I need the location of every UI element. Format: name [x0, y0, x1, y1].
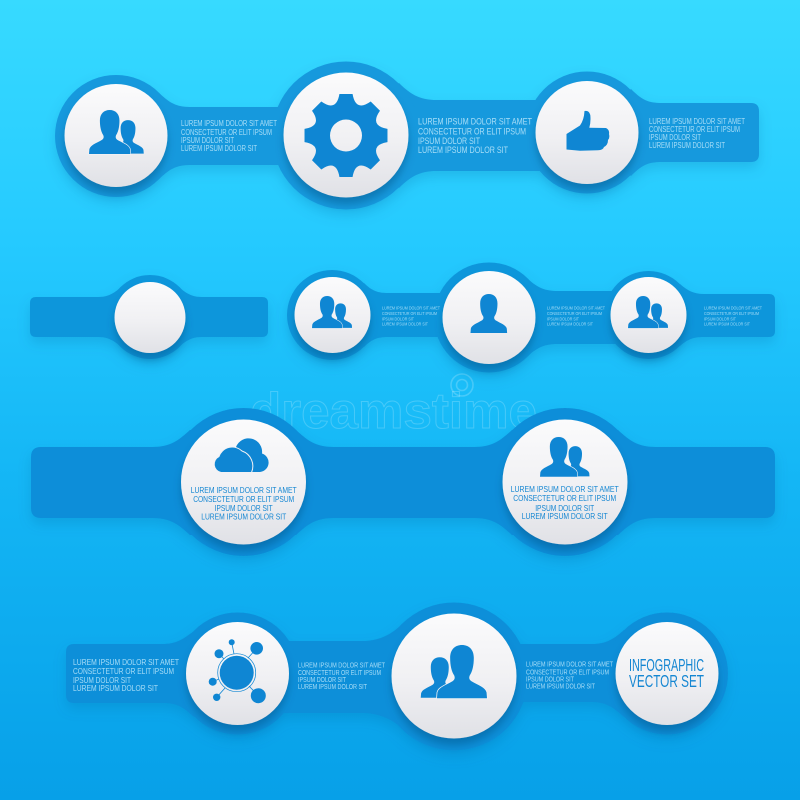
text block a: LUREM IPSUM DOLOR SIT AMET: [382, 306, 440, 311]
row 4: network, people, title ribbon: [66, 602, 728, 750]
text block 1: LUREM IPSUM DOLOR SIT: [181, 144, 257, 153]
text block 2: LUREM IPSUM DOLOR SIT AMET: [418, 116, 532, 126]
text block b: IPSUM DOLOR SIT: [547, 316, 579, 322]
text block 2: CONSECTETUR OR ELIT IPSUM: [418, 126, 526, 136]
text block d: LUREM IPSUM DOLOR SIT: [73, 683, 158, 693]
text block 3: LUREM IPSUM DOLOR SIT: [649, 141, 725, 150]
text block d: [73, 657, 179, 693]
text block 1: CONSECTETUR OR ELIT IPSUM: [181, 128, 272, 137]
text block a: CONSECTETUR OR ELIT IPSUM: [382, 311, 437, 316]
text block e: [298, 660, 385, 691]
disc: people with text: [502, 420, 628, 544]
icon: thumbs up: [566, 111, 609, 151]
icon: two people c: [628, 296, 668, 328]
icon: person: [470, 294, 507, 333]
disc: network: [186, 622, 289, 725]
text block c: IPSUM DOLOR SIT: [704, 316, 736, 322]
disc: people: [64, 84, 168, 187]
text block f: LUREM IPSUM DOLOR SIT AMET: [526, 660, 613, 668]
ribbon: blank band: [30, 275, 268, 359]
cloud disc text: LUREM IPSUM DOLOR SIT: [201, 512, 286, 522]
row 1: people, gear, thumbs-up ribbon: [55, 62, 759, 210]
text block 3: [649, 117, 745, 150]
text block d: IPSUM DOLOR SIT: [73, 675, 131, 685]
text block d: CONSECTETUR OR ELIT IPSUM: [73, 666, 174, 676]
ribbon: small people band: [287, 262, 775, 372]
disc: cloud: [181, 420, 306, 544]
text block f: LUREM IPSUM DOLOR SIT: [526, 682, 595, 690]
icon: network: [209, 639, 266, 703]
text block c: [704, 306, 762, 326]
disc: people a: [294, 277, 370, 353]
text block 3: CONSECTETUR OR ELIT IPSUM: [649, 125, 740, 134]
text block 1: IPSUM DOLOR SIT: [181, 136, 234, 145]
text block e: CONSECTETUR OR ELIT IPSUM: [298, 668, 381, 677]
icon: two people a: [312, 296, 352, 328]
people disc text: LUREM IPSUM DOLOR SIT: [522, 511, 608, 521]
text block b: CONSECTETUR OR ELIT IPSUM: [547, 311, 602, 316]
cloud disc text: LUREM IPSUM DOLOR SIT AMET: [191, 485, 297, 495]
text block 3: IPSUM DOLOR SIT: [649, 133, 701, 142]
text block 2: IPSUM DOLOR SIT: [418, 136, 480, 146]
disc: title: [616, 622, 718, 725]
text block 1: LUREM IPSUM DOLOR SIT AMET: [181, 119, 277, 128]
people disc text: LUREM IPSUM DOLOR SIT AMET: [511, 484, 619, 494]
text block a: IPSUM DOLOR SIT: [382, 316, 414, 322]
ribbon: row 1 band: [55, 62, 759, 210]
disc: person: [442, 271, 536, 364]
icon: two people: [540, 437, 590, 477]
people disc text: [511, 484, 619, 521]
text block b: LUREM IPSUM DOLOR SIT AMET: [547, 306, 605, 311]
ribbon: row 4 band: [66, 602, 728, 750]
icon: two people: [89, 110, 144, 154]
text block 1: [181, 119, 277, 153]
text block e: LUREM IPSUM DOLOR SIT: [298, 682, 367, 691]
disc: blank: [114, 282, 186, 353]
text block c: CONSECTETUR OR ELIT IPSUM: [704, 311, 759, 316]
people disc text: IPSUM DOLOR SIT: [535, 503, 594, 513]
text block 2: [418, 116, 532, 155]
icon: two people mirrored: [421, 645, 487, 698]
cloud disc text: CONSECTETUR OR ELIT IPSUM: [193, 494, 294, 504]
cloud disc text: [191, 485, 297, 522]
icon: gear: [305, 94, 387, 177]
row 3: wide band with cloud and people: [31, 408, 775, 556]
text block 3: LUREM IPSUM DOLOR SIT AMET: [649, 117, 745, 126]
disc: people large: [392, 614, 516, 738]
text block b: [547, 306, 605, 326]
text block 2: LUREM IPSUM DOLOR SIT: [418, 145, 508, 155]
text block c: LUREM IPSUM DOLOR SIT AMET: [704, 306, 762, 311]
text block a: [382, 306, 440, 326]
text block b: LUREM IPSUM DOLOR SIT: [547, 322, 593, 326]
text block f: [526, 660, 613, 690]
row 2 right: people ribbon: [287, 262, 775, 372]
cloud disc text: IPSUM DOLOR SIT: [215, 503, 273, 513]
text block e: LUREM IPSUM DOLOR SIT AMET: [298, 660, 385, 670]
text block e: IPSUM DOLOR SIT: [298, 675, 346, 684]
ribbon: wide band: [31, 408, 775, 556]
watermark: dreamstime: [250, 383, 537, 439]
text block d: LUREM IPSUM DOLOR SIT AMET: [73, 657, 179, 667]
disc: gear: [284, 72, 408, 198]
text block f: CONSECTETUR OR ELIT IPSUM: [526, 668, 609, 676]
title text: VECTOR SET: [629, 671, 704, 691]
title text: [629, 655, 704, 691]
disc: people c: [610, 277, 686, 353]
text block f: IPSUM DOLOR SIT: [526, 674, 574, 684]
disc: thumbs up: [536, 81, 638, 184]
icon: cloud: [214, 438, 269, 472]
text block c: LUREM IPSUM DOLOR SIT: [704, 322, 750, 326]
title text: INFOGRAPHIC: [629, 655, 704, 675]
people disc text: CONSECTETUR OR ELIT IPSUM: [513, 493, 616, 503]
text block a: LUREM IPSUM DOLOR SIT: [382, 322, 428, 326]
row 2 left: blank badge: [30, 275, 268, 359]
